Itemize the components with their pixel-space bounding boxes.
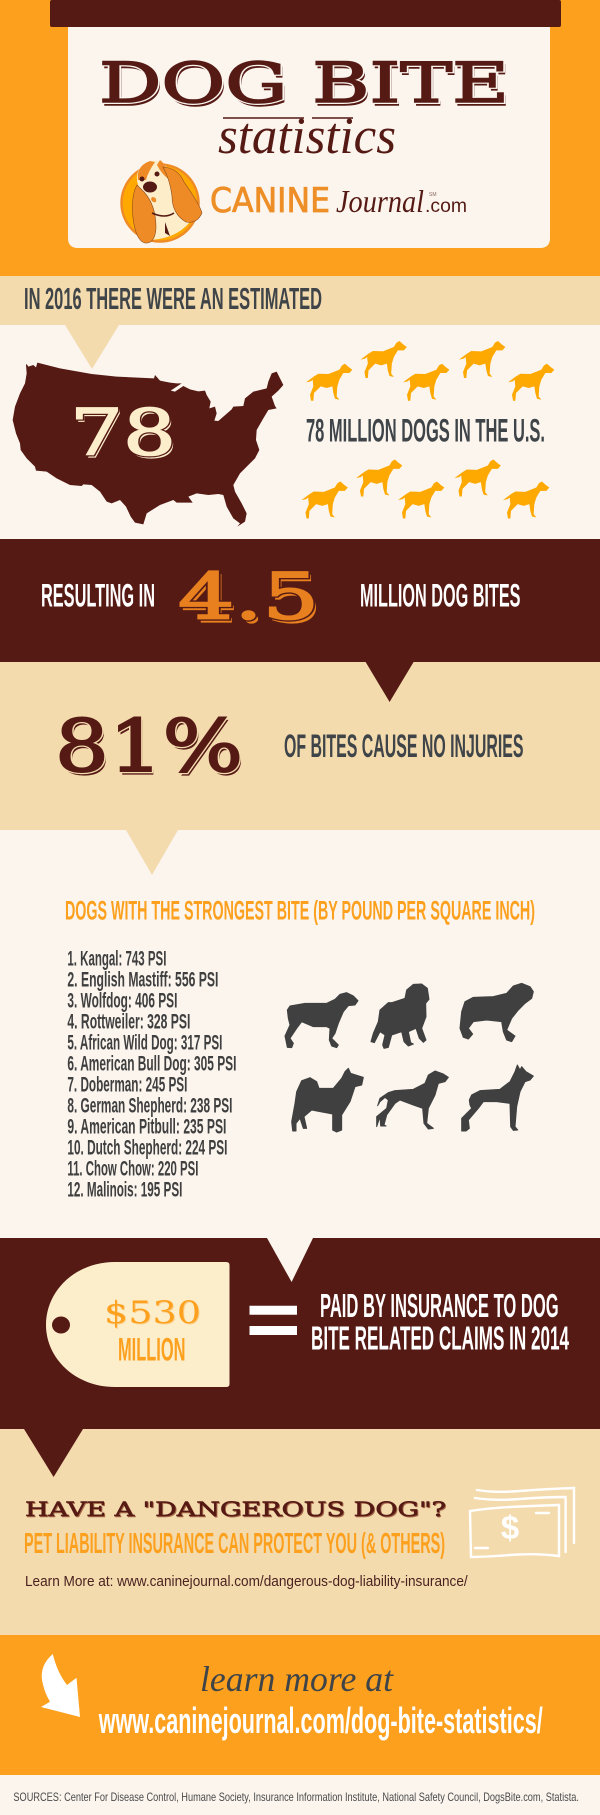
panel: 81 percent	[0, 662, 600, 830]
tag amount: $530	[105, 1296, 202, 1332]
number: 4.5: 4.5	[181, 564, 322, 638]
list: bite strength: 12. Malinois: 195 PSI	[67, 1178, 182, 1202]
number: 81%: 81%	[55, 704, 243, 788]
icons: dog breed silhouettes	[285, 983, 533, 1132]
intro text: IN 2016 THERE WERE AN ESTIMATED	[24, 282, 322, 316]
pointer	[24, 1429, 83, 1477]
logo: wordmark	[210, 181, 467, 221]
logo: wordmark: Journal	[336, 183, 424, 219]
number: 78: 78	[70, 396, 176, 470]
panel: header	[0, 0, 600, 276]
logo: canine journal dog	[122, 160, 202, 243]
list: bite strength: 11. Chow Chow: 220 PSI	[67, 1158, 198, 1180]
number: 78: 78	[72, 399, 178, 473]
text: paid by insurance	[311, 1287, 569, 1356]
title: dog bite: DOG BITE	[99, 51, 509, 115]
pointer	[267, 1238, 313, 1282]
title: dog bite	[99, 51, 511, 118]
panel: strongest bite	[0, 830, 600, 1238]
list: bite strength	[67, 948, 236, 1202]
pointer	[126, 830, 178, 875]
title card	[68, 27, 550, 248]
number: 78: 78	[70, 396, 176, 470]
icon: money stack	[470, 1488, 574, 1557]
icons: orange dogs top row	[306, 341, 554, 401]
equals sign	[250, 1306, 297, 1335]
title: dog bite: DOG BITE	[101, 54, 511, 118]
list: bite strength: 4. Rottweiler: 328 PSI	[67, 1010, 190, 1034]
icon: money stack: $	[501, 1509, 519, 1546]
pointer	[366, 662, 414, 702]
logo: wordmark: CANINE	[210, 181, 330, 221]
header bar	[50, 0, 561, 27]
heading: have a dangerous dog: HAVE A "DANGEROUS DOG"?	[26, 1499, 447, 1522]
icons: orange dogs bottom row	[302, 460, 549, 518]
logo: wordmark: .com	[425, 196, 467, 217]
number: 4.5: 4.5	[178, 560, 319, 634]
panel: insurance paid	[0, 1238, 600, 1429]
list: bite strength: 5. African Wild Dog: 317 PSI	[67, 1032, 222, 1054]
arrow	[41, 1654, 80, 1717]
number: 81%: 81%	[55, 704, 243, 788]
list: bite strength: 7. Doberman: 245 PSI	[67, 1074, 187, 1096]
price tag	[46, 1262, 230, 1387]
number: 4.5	[178, 560, 322, 638]
text: learn more link: Learn More at: www.caninejournal.com/dangerous-dog-liability-insurance/	[25, 1574, 469, 1590]
list: bite strength: 8. German Shepherd: 238 PSI	[67, 1094, 232, 1118]
panel: sources	[0, 1775, 600, 1815]
panel: learn more footer	[0, 1635, 600, 1775]
title: dog bite: DOG BITE	[99, 51, 509, 115]
list: bite strength: 6. American Bull Dog: 305 PSI	[67, 1052, 236, 1076]
tag unit: MILLION	[118, 1332, 186, 1368]
text: resulting in: RESULTING IN	[41, 578, 155, 614]
pointer	[65, 325, 119, 369]
heading: have a dangerous dog: HAVE A "DANGEROUS DOG"?	[25, 1498, 446, 1521]
subtitle: statistics: statistics	[218, 106, 396, 165]
panel: 78 million dogs	[0, 325, 600, 539]
list: bite strength: 2. English Mastiff: 556 PSI	[67, 968, 218, 992]
list: bite strength: 10. Dutch Shepherd: 224 PSI	[67, 1136, 227, 1160]
tag amount: $530	[104, 1295, 201, 1331]
list: bite strength: 3. Wolfdog: 406 PSI	[67, 990, 177, 1012]
heading: have a dangerous dog	[25, 1498, 447, 1522]
number: 81%: 81%	[57, 707, 245, 791]
logo: wordmark: SM	[429, 192, 436, 198]
panel: 2016 intro band	[0, 276, 600, 325]
number: 4.5: 4.5	[178, 560, 319, 634]
panel: 4.5 million bites	[0, 539, 600, 662]
map: united states	[13, 363, 283, 527]
panel: dangerous dog	[0, 1429, 600, 1635]
list: bite strength: 9. American Pitbull: 235 PSI	[67, 1116, 226, 1138]
list: bite strength: 1. Kangal: 743 PSI	[67, 948, 166, 970]
script: learn more at: learn more at	[200, 1660, 394, 1700]
